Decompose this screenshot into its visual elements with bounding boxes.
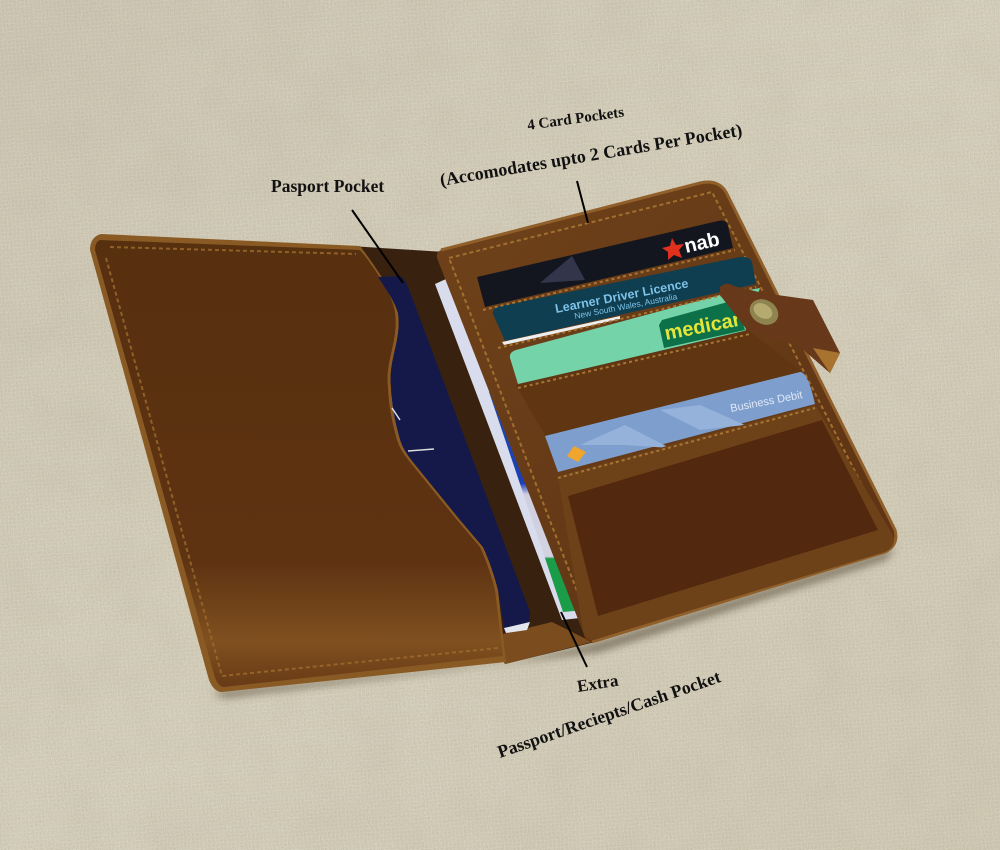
wallet <box>90 182 896 698</box>
label: extra pocket: Passport/Reciepts/Cash Pocket <box>495 666 723 762</box>
nab logo <box>662 238 684 260</box>
paper blue image strip <box>489 390 585 612</box>
label: passport pocket <box>271 176 403 283</box>
passport scratches <box>392 408 434 451</box>
card: nab: nab <box>682 228 722 258</box>
shadow <box>212 548 896 698</box>
brass snap <box>745 294 783 330</box>
card: licence <box>493 257 756 345</box>
extra pocket papers <box>435 279 582 620</box>
label: passport pocket: Pasport Pocket <box>271 176 384 196</box>
passport navy <box>378 276 530 633</box>
lower front pocket <box>558 405 894 640</box>
label: extra pocket <box>495 612 723 762</box>
right outer stitching <box>449 192 887 630</box>
snap strap <box>720 284 840 373</box>
spine and inner leather <box>350 246 595 664</box>
left cover <box>90 234 506 692</box>
card: licence: Learner Driver Licence <box>554 276 690 316</box>
passport pages <box>504 622 530 633</box>
label: card pockets: (Accomodates upto 2 Cards Per Pocket) <box>438 120 744 191</box>
spine lower tan strip <box>495 622 592 664</box>
card: medicare <box>510 288 760 384</box>
pocket stitching <box>483 250 815 478</box>
left pocket flap surface <box>95 240 503 687</box>
card: medicare: medicare <box>663 307 753 345</box>
right rim highlight <box>441 182 896 642</box>
leader line: extra pocket <box>561 612 587 667</box>
label: card pockets <box>438 105 744 223</box>
card: business debit: Business Debit <box>729 389 804 415</box>
leader line: card pockets <box>577 181 588 223</box>
card: business debit <box>545 372 815 472</box>
pocket strip 3 <box>516 330 802 437</box>
card: nab <box>477 221 733 307</box>
card: licence: New South Wales, Australia <box>573 291 678 321</box>
leader line: passport pocket <box>352 210 403 283</box>
label: card pockets: 4 Card Pockets <box>526 105 625 134</box>
label: extra pocket: Extra <box>576 671 620 696</box>
right cover <box>437 182 896 642</box>
left stitching <box>106 247 498 676</box>
